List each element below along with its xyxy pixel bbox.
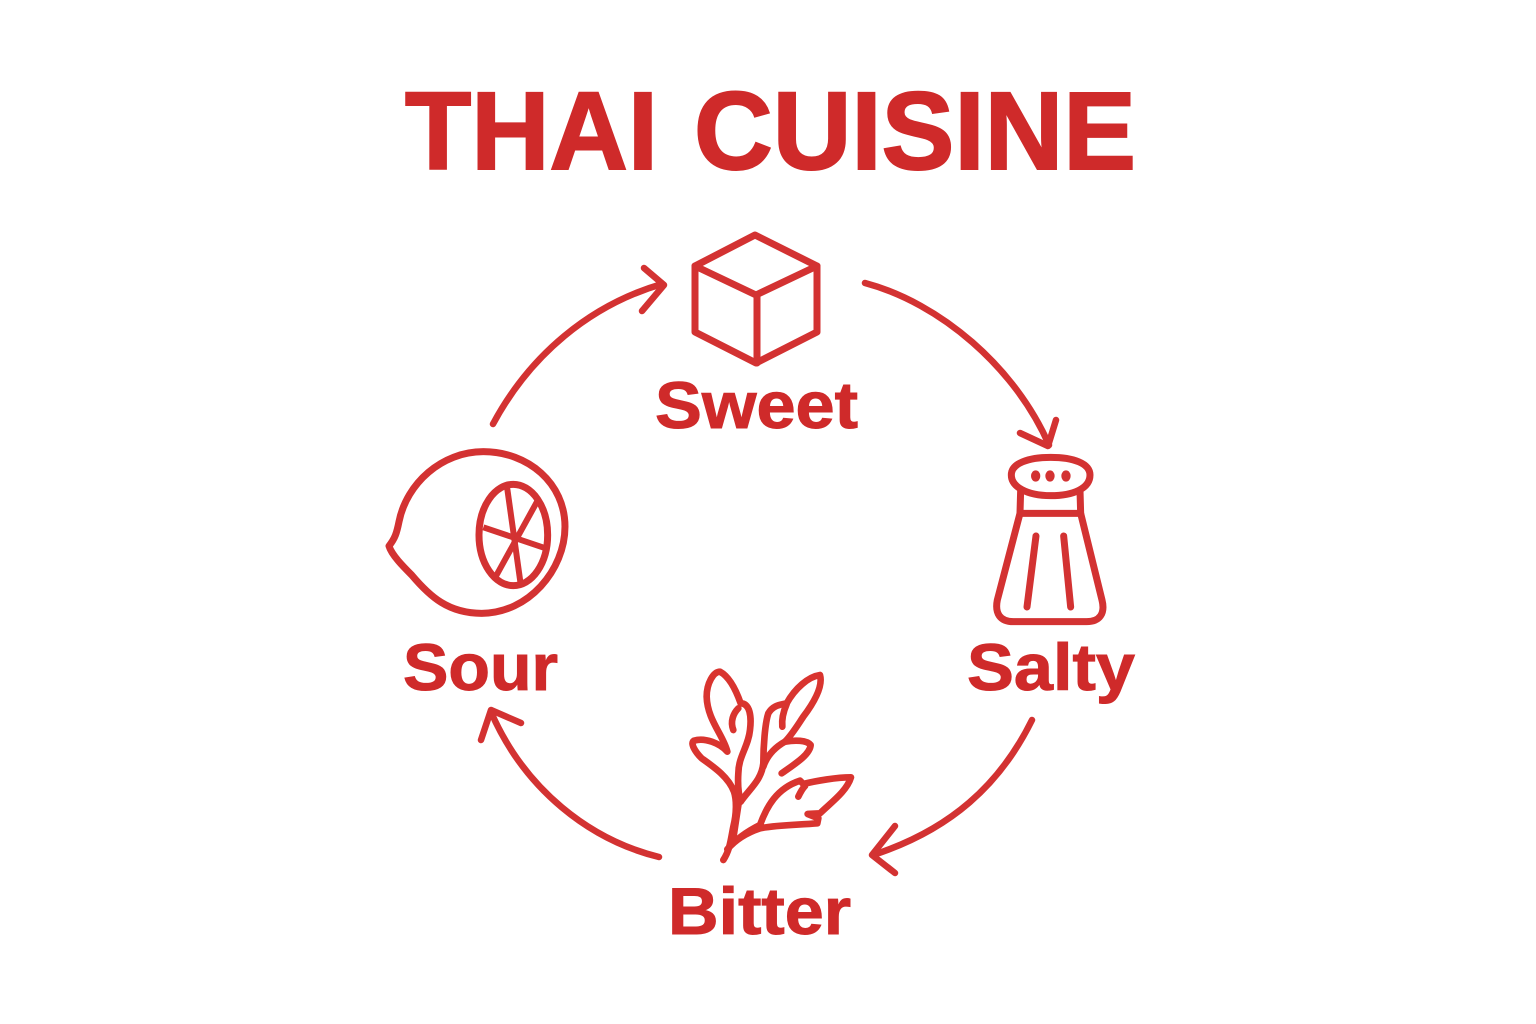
label: Sour: Sour [403,630,558,704]
label: Salty: Salty [967,630,1135,704]
icon: herb leaves [693,672,851,860]
icon: salt shaker [997,457,1103,622]
arrow: sour to sweet [493,268,664,424]
icon: sugar cube [695,235,817,363]
title [405,70,1136,193]
arrow: bitter to sour [481,710,659,857]
title: CUISINE [694,70,1136,193]
arrow: salty to bitter [872,720,1032,873]
title: THAI [405,70,658,193]
icon: lemon [389,452,565,613]
arrow: sweet to salty [865,283,1056,446]
label: Bitter: Bitter [668,874,851,948]
label: Sweet: Sweet [655,368,858,442]
icon detail: shaker holes [1031,470,1071,482]
